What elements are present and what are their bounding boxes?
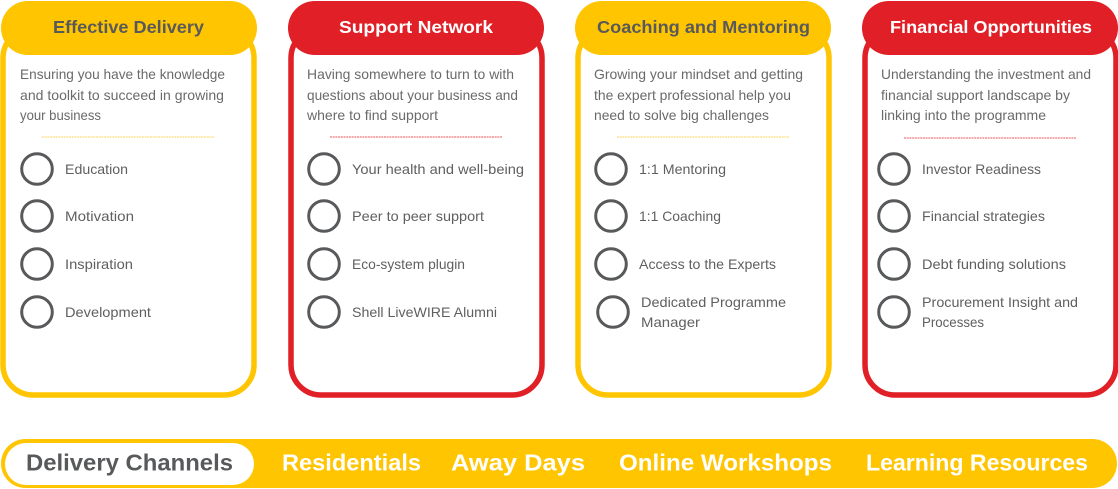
- list item: Inspiration: Inspiration: [65, 256, 133, 272]
- text block: description: Having somewhere to turn to with: [307, 66, 514, 82]
- text block: description: Understanding the investment and: [881, 66, 1091, 82]
- text block: description: the expert professional help you: [594, 87, 791, 103]
- list item: Investor Readiness: Investor Readiness: [922, 161, 1041, 177]
- list item: Investor Readiness: [879, 154, 1041, 184]
- list item: Motivation: [22, 201, 134, 231]
- list item: 1:1 Mentoring: 1:1 Mentoring: [639, 161, 726, 177]
- text block: description: linking into the programme: [881, 107, 1046, 123]
- list item: Education: [22, 154, 128, 184]
- list item: Procurement Insight and Processes: [879, 294, 1078, 330]
- text block: description: Growing your mindset and getting: [594, 66, 803, 82]
- panel: Financial Opportunities: [862, 1, 1118, 395]
- text block: description: [594, 66, 803, 123]
- list item: Financial strategies: [879, 201, 1045, 231]
- heading: Effective Delivery: Effective Delivery: [53, 17, 204, 37]
- channel: Away Days: Away Days: [451, 450, 585, 476]
- label: Delivery Channels: Delivery Channels: [26, 450, 233, 476]
- heading: Financial Opportunities: [862, 1, 1118, 55]
- list item: Shell LiveWIRE Alumni: Shell LiveWIRE Alumni: [352, 304, 497, 320]
- list item: Access to the Experts: [596, 249, 776, 279]
- channel: Online Workshops: Online Workshops: [619, 450, 832, 476]
- list item: Your health and well-being: [309, 154, 524, 184]
- list item: Dedicated Programme Manager: [598, 294, 786, 330]
- panel: Coaching and Mentoring: [575, 1, 831, 395]
- list item: Access to the Experts: Access to the Experts: [639, 256, 776, 272]
- text block: description: and toolkit to succeed in growing: [20, 87, 224, 103]
- list item: Education: Education: [65, 161, 128, 177]
- heading: Financial Opportunities: Financial Opportunities: [890, 17, 1092, 37]
- list item: Debt funding solutions: [879, 249, 1066, 279]
- text block: description: [306, 66, 518, 123]
- list item: Procurement Insight and Processes: Procurement Insight and: [922, 294, 1078, 310]
- list item: 1:1 Mentoring: [596, 154, 726, 184]
- list item: Dedicated Programme Manager: Manager: [641, 314, 700, 330]
- text block: description: your business: [20, 107, 101, 123]
- list item: Dedicated Programme Manager: Dedicated Programme: [641, 294, 786, 310]
- text block: description: financial support landscape by: [881, 87, 1070, 103]
- channel: Residentials: Residentials: [282, 450, 421, 476]
- list item: Procurement Insight and Processes: Processes: [922, 314, 984, 330]
- list item: Peer to peer support: [309, 201, 484, 231]
- text block: description: where to find support: [306, 107, 438, 123]
- list item: 1:1 Coaching: [596, 201, 721, 231]
- list item: Motivation: Motivation: [65, 208, 134, 224]
- list item: Your health and well-being: Your health and well-being: [352, 161, 524, 177]
- panel: Delivery Channels bar: [1, 439, 1117, 488]
- list item: Development: Development: [65, 304, 151, 320]
- list item: Development: [22, 297, 151, 327]
- list item: Eco-system plugin: [309, 249, 465, 279]
- list item: Eco-system plugin: Eco-system plugin: [352, 256, 465, 272]
- list item: Financial strategies: Financial strategies: [922, 208, 1045, 224]
- heading: Coaching and Mentoring: [575, 1, 831, 55]
- list item: Debt funding solutions: Debt funding solutions: [922, 256, 1066, 272]
- text block: description: Ensuring you have the knowledge: [20, 66, 225, 82]
- panel: Support Network: [288, 1, 544, 395]
- list item: Shell LiveWIRE Alumni: [309, 297, 497, 327]
- text block: description: [881, 66, 1091, 123]
- text block: description: [20, 66, 225, 123]
- heading: Support Network: Support Network: [339, 17, 493, 37]
- label: Delivery Channels: [5, 443, 254, 485]
- channel: Learning Resources: Learning Resources: [866, 450, 1088, 476]
- heading: Effective Delivery: [1, 1, 257, 55]
- list item: Inspiration: [22, 249, 133, 279]
- panel: Effective Delivery: [1, 1, 257, 395]
- list item: Peer to peer support: Peer to peer support: [352, 208, 484, 224]
- text block: description: questions about your business and: [307, 87, 518, 103]
- heading: Coaching and Mentoring: Coaching and Mentoring: [597, 17, 810, 37]
- list item: 1:1 Coaching: 1:1 Coaching: [639, 208, 721, 224]
- text block: description: need to solve big challenges: [594, 107, 769, 123]
- heading: Support Network: [288, 1, 544, 55]
